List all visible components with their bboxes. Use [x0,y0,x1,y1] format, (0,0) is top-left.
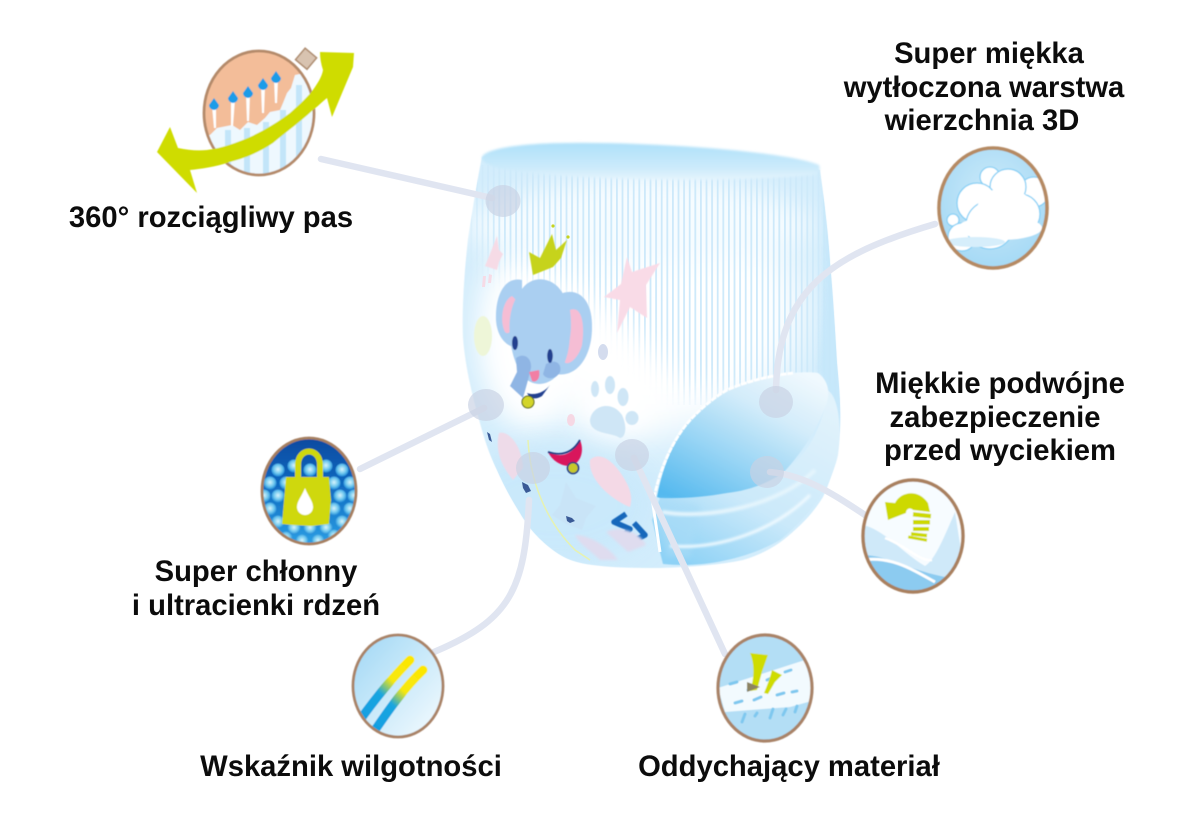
diaper illustration [455,143,845,568]
label: leak protection: przed wyciekiem [884,435,1116,467]
icon: embossed 3D top sheet [939,148,1049,268]
callout leader lines [321,159,935,654]
icon: absorbent core lock [258,438,360,548]
heart pink [498,433,523,480]
leader: top sheet [776,224,935,390]
double-headed lime arrow [157,52,354,193]
balloon pink [590,456,631,507]
right side blue shading [820,185,840,426]
cuff highlights [662,470,815,514]
label: super soft top sheet: Super miękka [894,38,1085,70]
paw print [590,376,638,438]
leader: waistband [321,159,492,198]
waistband droplets [209,71,281,110]
leader: breathable [634,458,725,654]
cuff blue strip [660,500,700,558]
outer leg cuff [652,390,840,565]
pastel cloud bottom [575,529,646,560]
label: super soft top sheet: wytłoczona warstwa [843,72,1125,104]
diaper body [463,147,840,568]
scalloped leg edge [654,373,793,498]
leader: core [360,408,484,469]
wetness indicator line on diaper [528,440,590,560]
star: pink large [604,257,660,333]
music note [614,514,645,541]
lime U-turn arrow [885,493,931,542]
label: breathable material: Oddychający materiał [638,751,940,783]
icon: stretchy waistband [157,40,354,193]
white glow on body [495,185,805,435]
pacifier [548,440,582,474]
star: pink left [485,236,503,270]
infographic canvas [70,42,1124,782]
callout anchor dots [468,185,793,488]
elephant mascot [496,279,592,408]
absorbent inner [657,372,828,498]
absorbent beads [262,458,356,543]
star light blue [552,482,596,530]
elephant head [509,279,570,384]
leader: indicator [434,500,529,652]
padlock [298,452,320,480]
dot [598,344,608,360]
label: leak protection [875,368,1125,467]
icon: wetness indicator [353,635,443,737]
label: super soft top sheet [843,38,1125,137]
crown [529,234,567,275]
tag [295,48,317,69]
elephant collar and bell [527,385,550,398]
small star icons [487,432,575,523]
lower blue haze [490,450,640,564]
label: absorbent core: i ultracienki rdzeń [132,590,380,622]
elephant ears [496,279,522,347]
label: absorbent core [132,556,380,622]
waist opening rim [482,143,820,180]
icon: breathable material [718,635,815,741]
dot pink [567,414,575,426]
icon: double leak guard [863,480,968,595]
lime upward arrows [750,653,768,691]
label: super soft top sheet: wierzchnia 3D [884,105,1079,137]
elephant trunk [510,356,531,398]
label: leak protection: Miękkie podwójne [875,368,1125,400]
leader: double protection [770,472,868,517]
label: 360 stretch waistband: 360° rozciągliwy pas [69,202,353,234]
inner lining [652,372,840,565]
label: leak protection: zabezpieczenie [890,402,1100,434]
pastel oval [474,316,492,356]
label: wetness indicator: Wskaźnik wilgotności [200,751,502,783]
label: absorbent core: Super chłonny [155,556,358,588]
ribbed elastic waist [470,174,824,405]
